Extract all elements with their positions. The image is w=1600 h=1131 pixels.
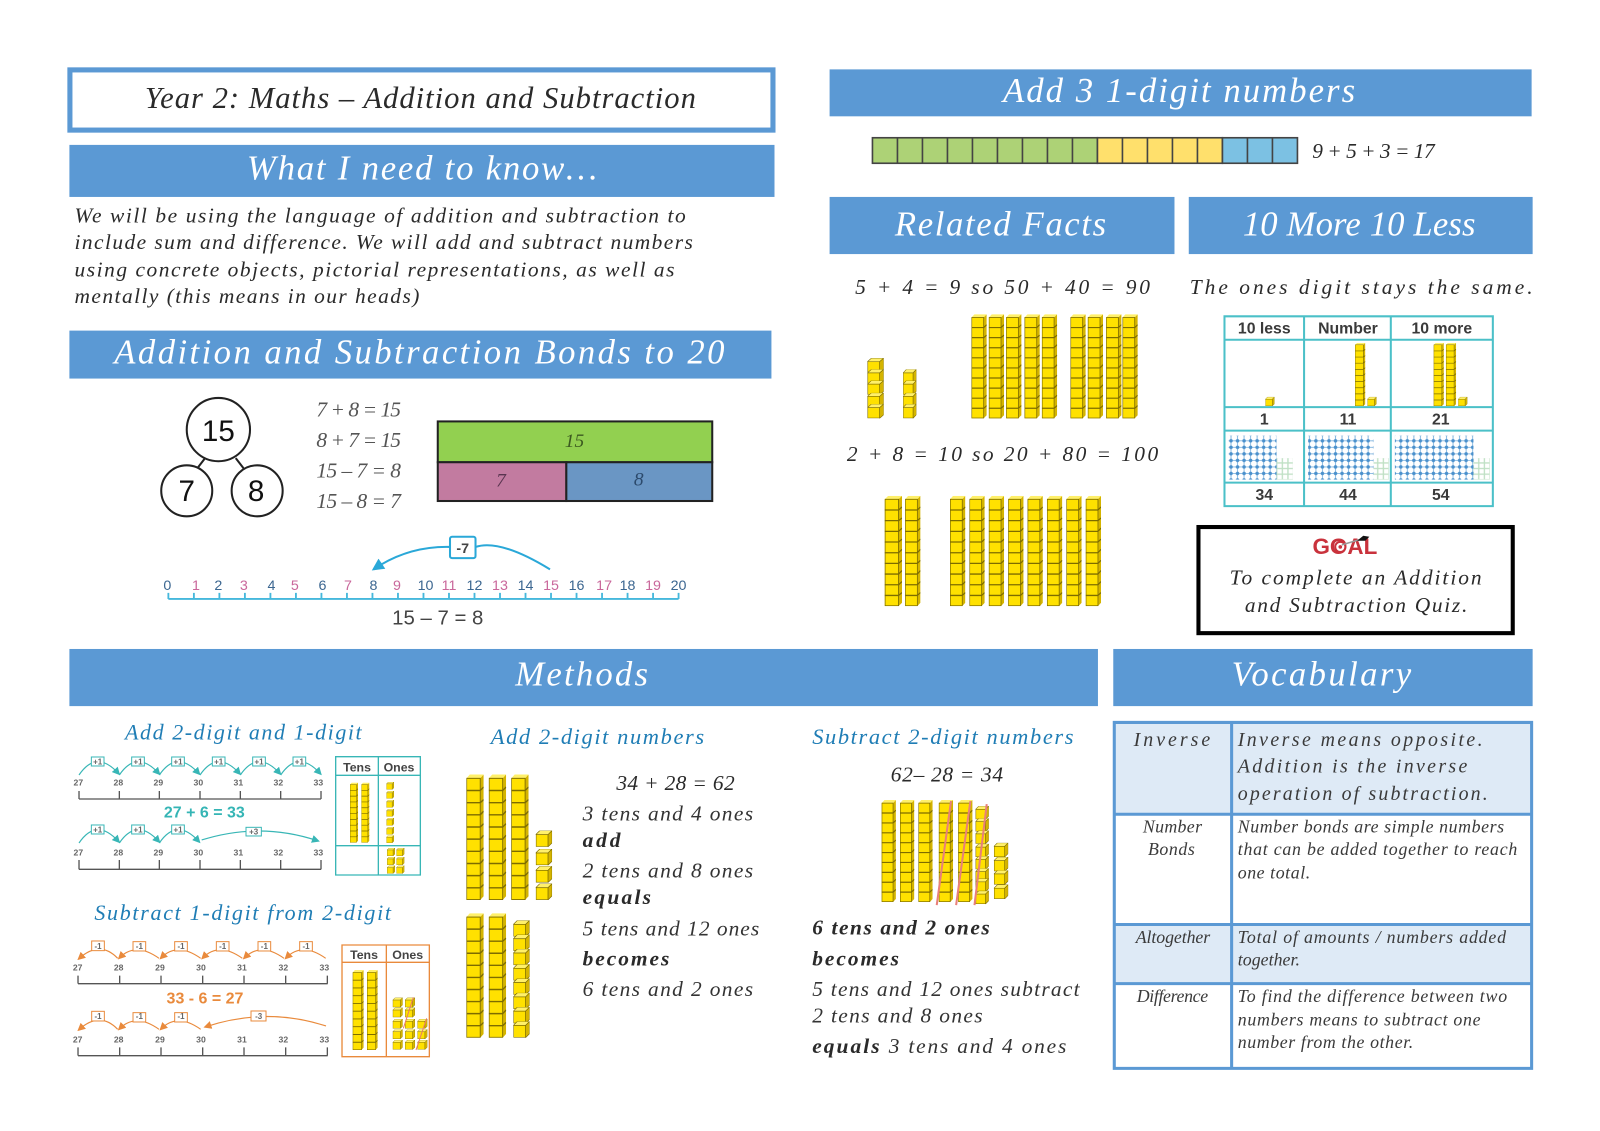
worked text: addition: 6 tens and 2 ones bbox=[583, 977, 753, 1001]
number lines: 27 + 6: +1 bbox=[93, 758, 103, 767]
panel: add three numbers bbox=[830, 69, 1532, 163]
number lines: 27 + 6: 31 bbox=[234, 778, 243, 788]
callout: goal: and Subtraction Quiz. bbox=[1245, 593, 1467, 617]
number lines: 27 + 6: 29 bbox=[154, 848, 163, 858]
equation: 62 - 28: 62– 28 = 34 bbox=[891, 763, 1003, 787]
term: altogether: Total of amounts / numbers added bbox=[1238, 927, 1506, 947]
vocabulary table bbox=[1114, 722, 1532, 1068]
heading: add 3 1-digit numbers: Add 3 1-digit numbers bbox=[1001, 71, 1355, 110]
number lines: 33 - 6: -1 bbox=[136, 942, 143, 951]
bar model: 8 bbox=[634, 470, 644, 491]
number lines: 33 - 6: -1 bbox=[94, 1012, 102, 1021]
number lines: 27 + 6: 27 bbox=[74, 848, 83, 858]
number line: 6 bbox=[318, 578, 326, 594]
number line: 17 bbox=[596, 578, 612, 594]
equation: 9 + 5 + 3: 9 + 5 + 3 = 17 bbox=[1312, 139, 1436, 163]
panel: methods bbox=[69, 649, 1098, 1058]
term: number bonds: that can be added together to reach bbox=[1238, 839, 1517, 859]
method: subtract 2-digit numbers bbox=[812, 724, 1081, 1058]
number lines: 27 + 6: 27 + 6 = 33 bbox=[164, 805, 245, 822]
worked text: addition: becomes bbox=[583, 946, 669, 970]
number line: 4 bbox=[267, 578, 275, 594]
worked text: subtraction bbox=[812, 916, 1081, 1058]
term: inverse: Inverse means opposite. bbox=[1237, 729, 1483, 751]
subheading: subtract 1-digit from 2-digit: Subtract 1-digit from 2-digit bbox=[94, 900, 392, 925]
term: number bonds: Bonds bbox=[1148, 839, 1195, 859]
base ten rods with crossings out bbox=[882, 800, 1008, 905]
panel: 10 more 10 less bbox=[1189, 197, 1533, 633]
heading: related facts: Related Facts bbox=[894, 205, 1106, 244]
number lines: 33 - 6: 32 bbox=[279, 1034, 288, 1044]
bond equations: 7 + 8 = 15 bbox=[316, 397, 401, 421]
term: difference: To find the difference between two bbox=[1238, 986, 1507, 1006]
number lines: 33 - 6: 32 bbox=[279, 962, 288, 972]
number line: 9 bbox=[393, 578, 401, 594]
fact: 5 + 4: 5 + 4 = 9 so 50 + 40 = 90 bbox=[855, 275, 1150, 299]
term: number bonds: one total. bbox=[1238, 863, 1310, 883]
number line: 18 bbox=[620, 578, 636, 594]
number lines: 27 + 6: 33 bbox=[314, 848, 323, 858]
tens and ones chart: subtract: Tens bbox=[350, 948, 378, 962]
number lines: 33 - 6: 28 bbox=[114, 962, 124, 972]
number lines: 33 - 6: 29 bbox=[155, 962, 165, 972]
bar model: 15 bbox=[565, 431, 584, 452]
term: inverse: operation of subtraction. bbox=[1238, 783, 1488, 805]
number line: 11 bbox=[442, 578, 456, 594]
callout: goal: To complete an Addition bbox=[1230, 566, 1482, 590]
term: number bonds: Number bonds are simple numbers bbox=[1237, 817, 1504, 837]
number lines: 33 - 6: -1 bbox=[94, 942, 102, 951]
term: altogether bbox=[1135, 927, 1506, 969]
number lines: 27 + 6: +3 bbox=[249, 827, 259, 836]
worked text: subtraction: 3 tens and 4 ones bbox=[888, 1034, 1066, 1058]
number lines: 33 - 6: -3 bbox=[255, 1012, 263, 1021]
worked text: subtraction: 6 tens and 2 ones bbox=[812, 916, 990, 940]
term: inverse: Inverse bbox=[1133, 729, 1210, 751]
bond equations: 15 – 7 = 8 bbox=[316, 459, 401, 483]
method: add 2-digit numbers bbox=[466, 724, 759, 1038]
heading: what I need to know bbox=[69, 145, 774, 197]
worked text: addition: equals bbox=[583, 885, 651, 909]
tens and ones chart: add bbox=[336, 757, 420, 875]
number line: 19 bbox=[645, 578, 661, 594]
number lines: 27 + 6: +1 bbox=[295, 758, 304, 767]
number lines: 33 - 6: 30 bbox=[196, 1034, 206, 1044]
part-whole diagram: 8 bbox=[248, 475, 264, 508]
number line: 2 bbox=[214, 578, 222, 594]
number line: 3 bbox=[240, 578, 248, 594]
panel: bonds to 20 bbox=[69, 331, 771, 629]
number lines: 33 - 6: -1 bbox=[177, 1012, 185, 1021]
heading: related facts bbox=[830, 197, 1174, 254]
panel: related facts bbox=[830, 197, 1174, 606]
number lines: 33 - 6: 33 bbox=[320, 1034, 329, 1044]
number lines: 27 + 6: +1 bbox=[254, 758, 264, 767]
heading: methods bbox=[69, 649, 1098, 706]
base ten rods: 5 + 4 and 50 + 40 bbox=[867, 314, 1138, 418]
number lines: 33 - 6: 29 bbox=[155, 1034, 165, 1044]
number line: 10 bbox=[418, 578, 434, 594]
number lines: 27 + 6: 30 bbox=[194, 848, 203, 858]
bar model: 7 bbox=[496, 471, 507, 492]
number lines: 27 + 6: +1 bbox=[214, 758, 224, 767]
table: 10 less, number, 10 more: Number bbox=[1318, 321, 1378, 338]
number lines: 27 + 6: 27 bbox=[74, 778, 83, 788]
worked text: addition: add bbox=[583, 828, 621, 852]
number lines: 27 + 6: 32 bbox=[274, 848, 283, 858]
subheading: add 2-digit numbers: Add 2-digit numbers bbox=[489, 724, 704, 749]
table: 10 less, number, 10 more: 54 bbox=[1432, 487, 1450, 504]
worked text: subtraction: becomes bbox=[812, 946, 899, 970]
number line: 20 bbox=[671, 578, 687, 594]
part-whole diagram: 7 bbox=[179, 475, 195, 508]
worked text: subtraction: 5 tens and 12 ones subtract bbox=[812, 977, 1081, 1001]
tens and ones chart: subtract: Ones bbox=[392, 948, 423, 962]
number line: 8 bbox=[370, 578, 378, 594]
worked text: addition: 3 tens and 4 ones bbox=[582, 801, 753, 825]
bar model bbox=[438, 421, 712, 501]
heading: bonds to 20: Addition and Subtraction Bonds to 20 bbox=[112, 332, 724, 371]
heading: vocabulary: Vocabulary bbox=[1232, 655, 1412, 694]
term: altogether: together. bbox=[1238, 949, 1300, 969]
worked text: addition bbox=[582, 771, 759, 1001]
number lines: 27 + 6: 31 bbox=[234, 848, 243, 858]
number line: 15 – 7 = 8 bbox=[392, 607, 483, 629]
heading: vocabulary bbox=[1113, 649, 1533, 706]
term: difference: number from the other. bbox=[1238, 1032, 1413, 1052]
number lines: 27 + 6: 32 bbox=[274, 778, 283, 788]
number lines: 33 - 6: 28 bbox=[114, 1034, 124, 1044]
term: inverse bbox=[1133, 729, 1488, 805]
worked text: addition: 34 + 28 = 62 bbox=[615, 771, 735, 795]
title bbox=[70, 70, 773, 130]
bond equations: 8 + 7 = 15 bbox=[316, 428, 401, 452]
number line: -7 bbox=[456, 541, 469, 557]
term: difference: numbers means to subtract one bbox=[1238, 1009, 1481, 1029]
number lines: 33 - 6: 27 bbox=[73, 1034, 83, 1044]
table: 10 less, number, 10 more: 1 bbox=[1260, 411, 1269, 428]
number lines: 33 - 6: 31 bbox=[237, 962, 247, 972]
number line: 12 bbox=[467, 578, 482, 594]
number line: 0 bbox=[163, 578, 171, 594]
number line bbox=[163, 537, 687, 629]
number lines: 33 - 6: 27 bbox=[73, 962, 83, 972]
table: 10 less, number, 10 more: 21 bbox=[1432, 411, 1450, 428]
number line: 7 bbox=[344, 578, 352, 594]
term: number bonds: Number bbox=[1142, 817, 1202, 837]
term: altogether: Altogether bbox=[1135, 927, 1210, 947]
number line: 15 bbox=[543, 578, 559, 594]
number lines: 33 - 6: -1 bbox=[302, 942, 310, 951]
part-whole diagram: 15 bbox=[202, 415, 235, 448]
heading: what I need to know: What I need to know… bbox=[247, 149, 597, 188]
subheading: subtract 2-digit numbers: Subtract 2-digit numbers bbox=[812, 724, 1074, 749]
callout: goal bbox=[1198, 527, 1513, 633]
number lines: 27 + 6: 29 bbox=[154, 778, 163, 788]
part-whole diagram bbox=[161, 398, 283, 516]
text block: introduction: using concrete objects, pictorial representations, as well as bbox=[75, 258, 674, 282]
number lines: 33 - 6: 33 - 6 = 27 bbox=[167, 990, 244, 1007]
term: difference: Difference bbox=[1136, 986, 1208, 1006]
table: 10 less, number, 10 more: 10 more bbox=[1412, 321, 1472, 338]
worked text: subtraction: 2 tens and 8 ones bbox=[812, 1003, 983, 1027]
number line: 5 bbox=[291, 578, 299, 594]
icon: goal logo with dart: GOAL bbox=[1312, 534, 1378, 559]
term: number bonds bbox=[1142, 817, 1517, 883]
number line: 1 bbox=[192, 578, 200, 594]
bond equations bbox=[316, 397, 402, 513]
heading: 10 more 10 less: 10 More 10 Less bbox=[1243, 205, 1475, 244]
number lines: 33 - 6: 31 bbox=[237, 1034, 247, 1044]
number lines: 33 - 6: -1 bbox=[177, 942, 185, 951]
number lines: 27 + 6: +1 bbox=[133, 758, 143, 767]
table: 10 less, number, 10 more: 10 less bbox=[1238, 321, 1291, 338]
fact: 2 + 8: 2 + 8 = 10 so 20 + 80 = 100 bbox=[847, 442, 1158, 466]
heading: 10 more 10 less bbox=[1189, 197, 1533, 254]
term: inverse: Addition is the inverse bbox=[1236, 755, 1468, 777]
table: 10 less, number, 10 more: 34 bbox=[1255, 487, 1273, 504]
number line: 16 bbox=[569, 578, 585, 594]
cube bar 9 + 5 + 3 bbox=[872, 138, 1297, 163]
number lines: 27 + 6: 28 bbox=[114, 848, 123, 858]
worked text: addition: 2 tens and 8 ones bbox=[583, 859, 753, 883]
text block: introduction: include sum and difference. We will add and subtract numbers bbox=[75, 230, 693, 254]
number lines: 33 - 6: 30 bbox=[196, 962, 206, 972]
worked text: subtraction: equals bbox=[812, 1034, 880, 1058]
heading: add 3 1-digit numbers bbox=[830, 69, 1532, 116]
number lines: 27 + 6: +1 bbox=[133, 826, 143, 835]
number lines: 27 + 6: 30 bbox=[194, 778, 203, 788]
number line: 14 bbox=[518, 578, 534, 594]
text block: introduction: mentally (this means in our heads) bbox=[75, 284, 419, 308]
note: ones digit: The ones digit stays the same. bbox=[1190, 275, 1533, 299]
number lines: 27 + 6: 33 bbox=[314, 778, 323, 788]
number lines: 33 - 6: -1 bbox=[136, 1012, 143, 1021]
heading: methods: Methods bbox=[514, 655, 648, 694]
panel: what I need to know bbox=[69, 145, 774, 308]
method: add and subtract on number lines bbox=[73, 719, 429, 1057]
worked text: addition: 5 tens and 12 ones bbox=[583, 917, 759, 941]
number lines: 27 + 6 bbox=[74, 757, 323, 869]
number lines: 33 - 6: -1 bbox=[219, 942, 227, 951]
bond equations: 15 – 8 = 7 bbox=[316, 489, 402, 513]
panel: vocabulary bbox=[1113, 649, 1533, 1068]
number lines: 27 + 6: +1 bbox=[93, 826, 103, 835]
table: 10 less, number, 10 more bbox=[1224, 316, 1493, 506]
table: 10 less, number, 10 more: 11 bbox=[1340, 411, 1357, 428]
term: difference bbox=[1136, 986, 1507, 1052]
text block: introduction: We will be using the language of addition and subtraction to bbox=[75, 203, 686, 227]
number line: 13 bbox=[492, 578, 508, 594]
number lines: 33 - 6: 33 bbox=[320, 962, 329, 972]
number lines: 33 - 6 bbox=[73, 941, 329, 1056]
tens and ones chart: subtract bbox=[342, 945, 429, 1057]
number lines: 27 + 6: +1 bbox=[173, 758, 183, 767]
number lines: 27 + 6: 28 bbox=[114, 778, 123, 788]
base ten rods: 20 + 80 bbox=[885, 496, 1101, 606]
subheading: add 2-digit and 1-digit: Add 2-digit and 1-digit bbox=[123, 719, 363, 744]
text block: introduction bbox=[75, 203, 693, 308]
tens and ones chart: add: Tens bbox=[343, 760, 371, 774]
number lines: 33 - 6: -1 bbox=[261, 942, 268, 951]
table: 10 less, number, 10 more: 44 bbox=[1339, 487, 1357, 504]
tens and ones chart: add: Ones bbox=[384, 760, 415, 774]
title: Year 2: Maths – Addition and Subtraction bbox=[145, 81, 696, 115]
base ten rods: 34 and 28 bbox=[466, 774, 552, 1038]
number lines: 27 + 6: +1 bbox=[173, 826, 183, 835]
